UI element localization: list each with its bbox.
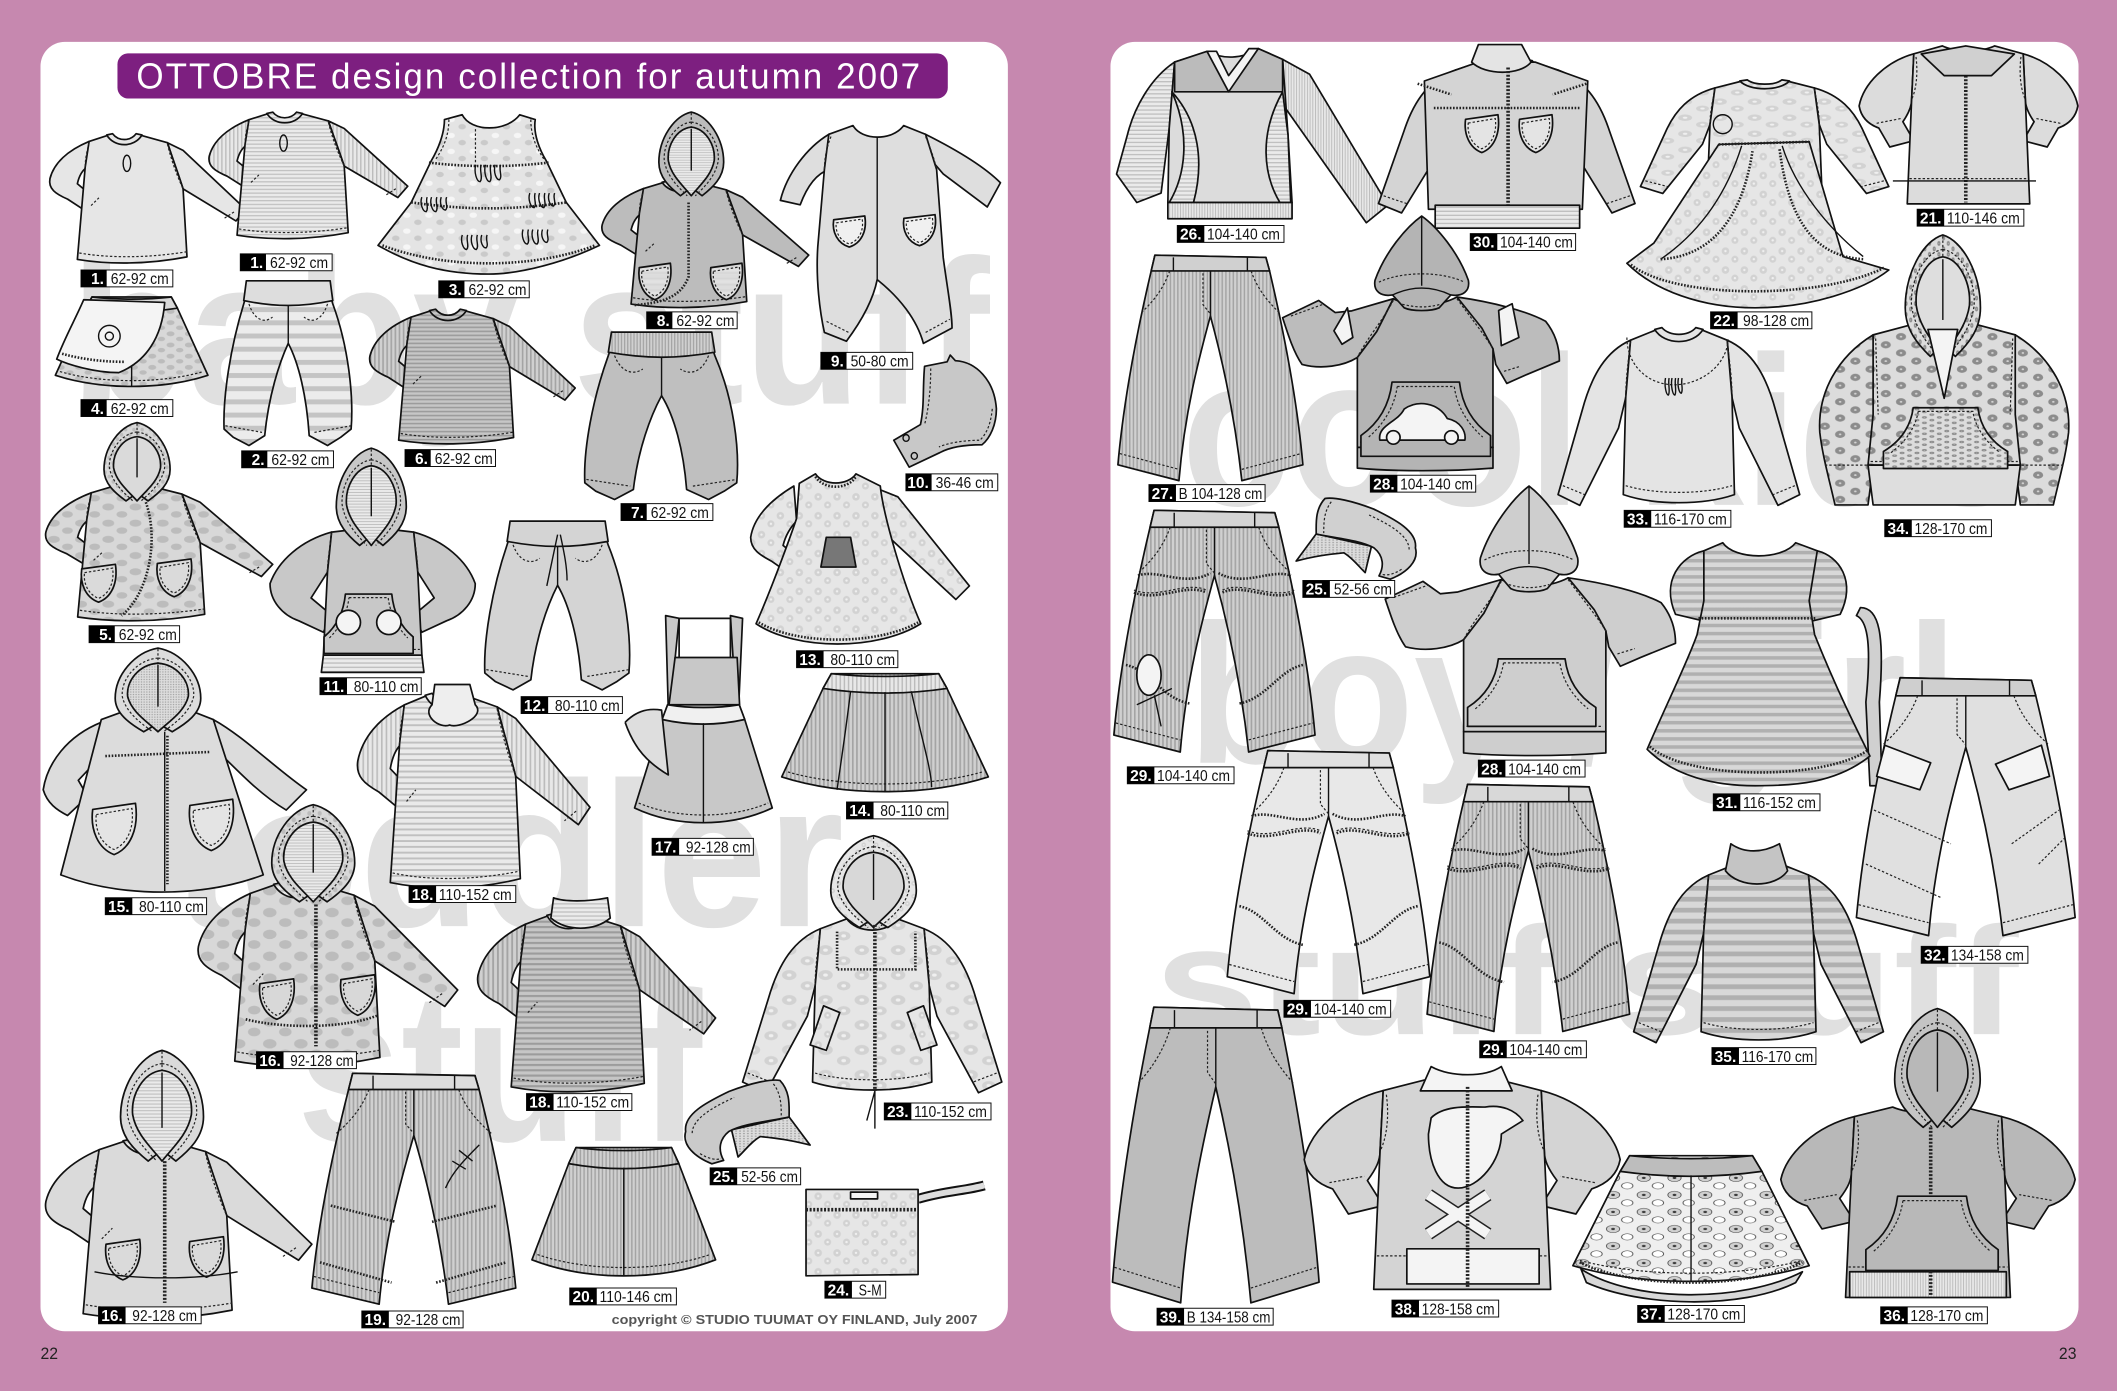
size label 9: 9. (831, 354, 844, 371)
size label 25: 52-56 cm (1334, 582, 1392, 599)
size label 21: 21. (1920, 210, 1941, 227)
watermark: stuff: stuff (297, 949, 703, 1187)
size label 17: 92-128 cm (686, 840, 751, 857)
size label 25: 25. (1306, 582, 1327, 599)
size label 28: 28. (1481, 761, 1503, 778)
size label 21: 110-146 cm (1947, 210, 2020, 227)
size label 10: 10. (907, 475, 929, 492)
size label 9 (821, 352, 913, 371)
watermark: stuff stuff: stuff stuff (1154, 895, 2019, 1067)
garment 1 striped shirt (209, 112, 408, 239)
size label 28: 104-140 cm (1508, 761, 1581, 778)
size label 16: 16. (101, 1308, 123, 1325)
garment 28 hooded sweater (1385, 486, 1676, 756)
size label 26 (1177, 225, 1284, 244)
page number 22: 22 (41, 1345, 58, 1363)
garment 28 hooded sweater with car (1283, 216, 1559, 471)
size label 29: 104-140 cm (1314, 1002, 1387, 1019)
size label 17: 17. (655, 840, 676, 857)
size label 17 (652, 838, 753, 857)
size label 7: 62-92 cm (651, 505, 709, 522)
garment 26 V-neck sweater (1117, 49, 1388, 223)
garment 34 floral kangaroo hoodie (1820, 235, 2069, 505)
size label 11: 11. (324, 679, 344, 696)
garment 10 bonnet (894, 355, 996, 467)
garment 35 striped turtleneck (1634, 844, 1883, 1043)
garment 29 owl trousers (1114, 510, 1315, 752)
garment 18 striped top with frill (357, 684, 590, 888)
garment 25 cap (685, 1080, 810, 1164)
garment 29 ribbed trousers (1427, 784, 1630, 1031)
size label 8 (647, 312, 737, 330)
size label 23: 110-152 cm (914, 1104, 987, 1121)
garment 14 pleated skirt (782, 674, 988, 792)
size label 18 (409, 886, 516, 904)
size label 5 (89, 626, 180, 644)
size label 24 (825, 1281, 886, 1299)
size label 1 (81, 270, 173, 288)
size label 34 (1885, 520, 1991, 538)
size label 20: 20. (572, 1289, 594, 1306)
size label 35: 35. (1715, 1049, 1736, 1066)
size label 25 (1303, 581, 1395, 599)
size label 27: 27. (1152, 486, 1173, 503)
size label 16: 92-128 cm (290, 1053, 354, 1070)
panel: right page (1110, 42, 2079, 1331)
garment 37 flower skirt (1573, 1156, 1809, 1302)
page number 23: 23 (2059, 1345, 2076, 1363)
size label 15: 15. (108, 899, 130, 916)
garment 30 zip jacket (1378, 45, 1635, 228)
size label 1 (240, 254, 332, 272)
size label 29: 29. (1287, 1002, 1308, 1019)
size label 13: 13. (799, 652, 821, 669)
size label 32 (1921, 946, 2028, 965)
size label 18: 110-152 cm (439, 887, 512, 904)
size label 35: 116-170 cm (1742, 1049, 1813, 1066)
size label 16: 16. (259, 1053, 281, 1070)
size label 11 (320, 678, 421, 696)
size label 19: 19. (365, 1312, 386, 1329)
size label 29 (1480, 1041, 1586, 1059)
size label 30 (1470, 234, 1576, 252)
size label 18: 18. (412, 887, 433, 904)
size label 31: 31. (1716, 795, 1738, 812)
size label 26: 26. (1180, 227, 1202, 244)
size label 21 (1917, 209, 2024, 227)
garment 19 trousers with panels (312, 1073, 516, 1304)
size label 30: 30. (1473, 235, 1495, 252)
size label 28: 28. (1373, 476, 1395, 493)
size label 36 (1881, 1307, 1987, 1325)
size label 29 (1127, 767, 1234, 785)
size label 38: 38. (1395, 1301, 1416, 1318)
garment 15 coat (43, 648, 306, 892)
size label 14 (847, 802, 948, 820)
size label 28 (1478, 760, 1585, 778)
garment 38 skull jacket (1304, 1067, 1620, 1289)
garment 39 straight trousers (1113, 1007, 1319, 1303)
size label 38: 128-158 cm (1422, 1301, 1495, 1318)
garment 18 striped turtleneck (478, 898, 716, 1092)
size label 22: 98-128 cm (1743, 313, 1809, 330)
size label 26: 104-140 cm (1207, 227, 1280, 244)
size label 35 (1712, 1048, 1816, 1066)
size label 1: 62-92 cm (270, 255, 328, 272)
size label 33 (1624, 510, 1731, 529)
size label 1: 62-92 cm (111, 271, 169, 288)
size label 13: 80-110 cm (830, 652, 895, 669)
size label 33: 116-170 cm (1654, 512, 1727, 529)
size label 1: 1. (250, 255, 263, 272)
garment 8 hooded jacket (602, 112, 809, 308)
size label 14: 14. (849, 803, 871, 820)
size label 18 (527, 1094, 632, 1112)
garment 23 floral zip jacket (743, 836, 1002, 1129)
garment 2 striped trousers (224, 281, 352, 446)
size label 10: 36-46 cm (936, 475, 994, 492)
size label 19 (362, 1311, 463, 1329)
size label 25: 52-56 cm (741, 1169, 798, 1186)
size label 7 (621, 504, 713, 522)
size label 15: 80-110 cm (139, 899, 204, 916)
size label 38 (1392, 1300, 1499, 1318)
garment 12 drawstring trousers (485, 521, 630, 690)
garment 20 ribbed skirt (532, 1148, 716, 1276)
size label 20 (570, 1288, 676, 1306)
garment 25 cap (1296, 498, 1416, 579)
size label 37 (1638, 1306, 1744, 1324)
size label 37: 37. (1640, 1307, 1662, 1324)
size label 31: 116-152 cm (1743, 795, 1816, 812)
size label 18: 110-152 cm (556, 1095, 629, 1112)
size label 39: B 134-158 cm (1187, 1309, 1270, 1326)
size label 16 (99, 1307, 201, 1325)
size label 24: S-M (859, 1282, 882, 1299)
panel background: right (1110, 42, 2079, 1331)
size label 9: 50-80 cm (851, 354, 909, 371)
size label 2: 62-92 cm (271, 452, 329, 469)
garment 1 shirt (50, 134, 246, 263)
size label 32: 32. (1924, 948, 1946, 965)
garment 7 trousers (585, 332, 738, 500)
garment 27 straight trousers (1118, 255, 1303, 481)
size label 27: B 104-128 cm (1179, 486, 1262, 503)
size label 36: 36. (1883, 1308, 1905, 1325)
garment 21 zip jacket (1859, 46, 2078, 204)
size label 12: 12. (524, 698, 545, 715)
size label 3 (439, 281, 529, 299)
size label 6 (405, 450, 495, 468)
size label 30: 104-140 cm (1500, 235, 1573, 252)
garment 6 striped shirt (370, 309, 575, 444)
size label 23: 23. (887, 1104, 909, 1121)
size label 25: 25. (713, 1169, 734, 1186)
size label 29: 104-140 cm (1157, 768, 1230, 785)
copyright line: copyright © STUDIO TUUMAT OY FINLAND, July 2007 (612, 1312, 977, 1327)
size label 14: 80-110 cm (880, 803, 945, 820)
garment 16 hooded jacket with yoke (45, 1050, 312, 1319)
size label 12 (521, 697, 622, 715)
size label 22 (1711, 312, 1812, 330)
panel: left page (41, 42, 1008, 1331)
garment 13 floral dress (751, 474, 969, 644)
size label 36: 128-170 cm (1910, 1308, 1983, 1325)
size label 4 (81, 400, 173, 418)
title banner: OTTOBRE design collection for autumn 2007 (136, 55, 922, 96)
size label 18: 18. (529, 1095, 551, 1112)
size label 3: 3. (449, 282, 462, 299)
size label 24: 24. (828, 1282, 849, 1299)
size label 29: 29. (1482, 1042, 1504, 1059)
size label 28: 104-140 cm (1400, 476, 1473, 493)
size label 4: 4. (91, 401, 104, 418)
garment 3 tiered dress (378, 115, 599, 274)
size label 27 (1149, 485, 1265, 503)
size label 39: 39. (1160, 1309, 1181, 1326)
size label 8: 8. (657, 313, 670, 330)
size label 32: 134-158 cm (1951, 948, 2024, 965)
size label 10 (906, 474, 998, 492)
size label 37: 128-170 cm (1667, 1307, 1740, 1324)
garment 24 zip pouch (806, 1185, 984, 1276)
size label 8: 62-92 cm (676, 313, 734, 330)
garment 36 zip hoodie (1781, 1009, 2075, 1297)
size label 29 (1284, 1000, 1391, 1019)
size label 20: 110-146 cm (599, 1289, 672, 1306)
size label 1: 1. (91, 271, 104, 288)
garment 22 long floral dress (1627, 80, 1889, 308)
size label 12: 80-110 cm (555, 698, 620, 715)
garment 9 romper (780, 126, 1000, 343)
size label 13 (797, 651, 898, 669)
garment 29 light trousers (1227, 751, 1430, 994)
size label 3: 62-92 cm (468, 282, 527, 299)
size label 6: 62-92 cm (435, 451, 493, 468)
size label 5: 5. (99, 627, 112, 644)
garment 33 long sleeve top (1558, 328, 1800, 505)
size label 5: 62-92 cm (119, 627, 177, 644)
size label 34: 34. (1888, 521, 1909, 538)
size label 22: 22. (1713, 313, 1735, 330)
size label 31 (1713, 794, 1820, 812)
size label 6: 6. (415, 451, 428, 468)
garment 16 floral hooded jacket (198, 805, 458, 1066)
garment 31 striped dress (1647, 543, 1882, 786)
garment 5 floral hooded jacket (46, 423, 273, 621)
size label 28 (1370, 475, 1476, 493)
garment 32 cargo trousers (1856, 678, 2075, 936)
size label 4: 62-92 cm (111, 401, 169, 418)
watermark: baby stuff: baby stuff (70, 217, 991, 448)
size label 25 (710, 1168, 801, 1186)
watermark: toddler: toddler (173, 739, 844, 970)
size label 39 (1157, 1308, 1273, 1326)
panel background: left (41, 42, 1008, 1331)
size label 16 (257, 1052, 356, 1070)
size label 2 (242, 451, 333, 469)
size label 23 (884, 1103, 991, 1121)
garment 11 hooded sweater (270, 448, 475, 672)
garment 17 overall skirt (625, 616, 772, 823)
garment 4 wrap skirt (55, 297, 208, 386)
watermark: cool kids: cool kids (1181, 313, 2025, 551)
size label 15 (105, 898, 207, 916)
size label 7: 7. (631, 505, 644, 522)
size label 11: 80-110 cm (354, 679, 419, 696)
size label 29: 29. (1130, 768, 1152, 785)
size label 2: 2. (252, 452, 265, 469)
size label 33: 33. (1627, 512, 1649, 529)
size label 29: 104-140 cm (1509, 1042, 1582, 1059)
size label 34: 128-170 cm (1914, 521, 1987, 538)
watermark: boy / girl: boy / girl (1188, 584, 1958, 806)
size label 16: 92-128 cm (132, 1308, 197, 1325)
size label 19: 92-128 cm (396, 1312, 460, 1329)
